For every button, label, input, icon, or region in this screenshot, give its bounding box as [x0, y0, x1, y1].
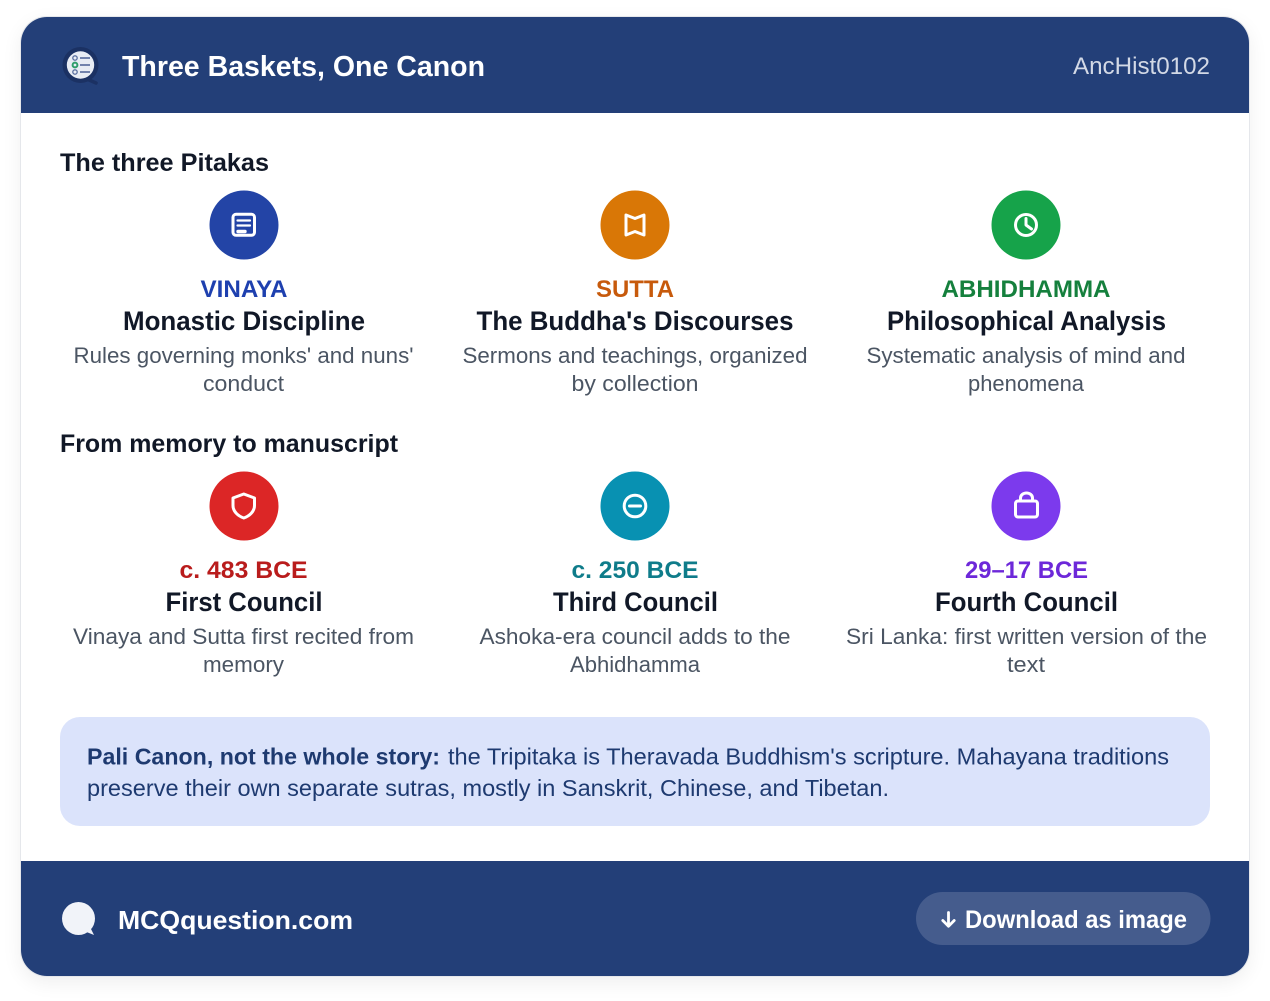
description: Vinaya: conduct — [203, 371, 284, 396]
download button: Download as image — [965, 906, 1187, 934]
download button — [916, 892, 1210, 945]
subtitle: Philosophical Analysis: Philosophical Analysis — [887, 306, 1166, 336]
panel: First Council — [73, 472, 414, 677]
icon: lock bag — [992, 472, 1060, 540]
date: c. 250 BCE: c. 250 BCE — [572, 557, 698, 584]
description: First Council — [73, 624, 414, 677]
description: Abhidhamma: Systematic analysis of mind and — [866, 343, 1186, 368]
callout — [60, 717, 1210, 826]
date: 29–17 BCE: 29–17 BCE — [965, 557, 1088, 584]
description: First Council: Vinaya and Sutta first recited from — [73, 624, 414, 649]
description: Third Council: Ashoka-era council adds to the — [480, 624, 790, 649]
panel: Third Council — [480, 472, 790, 677]
title: Three Baskets, One Canon — [122, 51, 485, 83]
icon: footer logo — [62, 902, 95, 935]
subtitle: The Buddha's Discourses: The Buddha's Discourses — [476, 306, 794, 336]
description: First Council: memory — [203, 652, 284, 677]
description: Fourth Council — [846, 624, 1207, 677]
label: VINAYA: VINAYA — [200, 276, 288, 303]
icon: minus circle — [600, 472, 670, 540]
callout: Pali Canon, not the whole story: — [87, 744, 440, 770]
heading: the three Pitakas: The three Pitakas — [60, 149, 269, 177]
description: Vinaya — [74, 343, 414, 396]
icon: document — [210, 190, 278, 260]
icon: open book — [600, 190, 670, 260]
description: Abhidhamma — [866, 343, 1186, 396]
description: Sutta — [462, 343, 808, 396]
callout: preserve their own separate sutras, mostly in Sanskrit, Chinese, and Tibetan. — [87, 775, 889, 801]
header band — [21, 17, 1249, 113]
panel: Vinaya — [74, 190, 414, 396]
panel: Sutta — [462, 190, 808, 396]
icon: shield — [210, 472, 278, 540]
description: Vinaya: Rules governing monks' and nuns' — [74, 343, 414, 368]
description: Abhidhamma: phenomena — [968, 371, 1085, 396]
icon: down arrow — [943, 912, 954, 926]
brand name: MCQquestion.com — [118, 905, 353, 935]
subtitle: Third Council: Third Council — [553, 587, 718, 617]
icon: quiz logo — [62, 47, 98, 83]
icon: clock — [992, 190, 1060, 260]
panel: Abhidhamma — [866, 190, 1186, 396]
description: Sutta: by collection — [572, 371, 698, 396]
subtitle: Monastic Discipline: Monastic Discipline — [123, 306, 365, 336]
footer band — [21, 861, 1249, 976]
label: SUTTA: SUTTA — [596, 276, 674, 303]
panel: Fourth Council — [846, 472, 1207, 677]
description: Fourth Council: Sri Lanka: first written version of the — [846, 624, 1207, 649]
subtitle: First Council: First Council — [166, 587, 322, 617]
subtitle: Fourth Council: Fourth Council — [935, 587, 1118, 617]
description: Third Council — [480, 624, 790, 677]
heading: from memory to manuscript: From memory to manuscript — [60, 430, 399, 458]
description: Third Council: Abhidhamma — [570, 652, 701, 677]
label: ABHIDHAMMA: ABHIDHAMMA — [942, 276, 1110, 303]
description: Sutta: Sermons and teachings, organized — [462, 343, 808, 368]
code label: AncHist0102 — [1073, 53, 1210, 80]
date: c. 483 BCE: c. 483 BCE — [180, 557, 308, 584]
description: Fourth Council: text — [1007, 652, 1045, 677]
callout: the Tripitaka is Theravada Buddhism's scripture. Mahayana traditions — [448, 744, 1169, 770]
